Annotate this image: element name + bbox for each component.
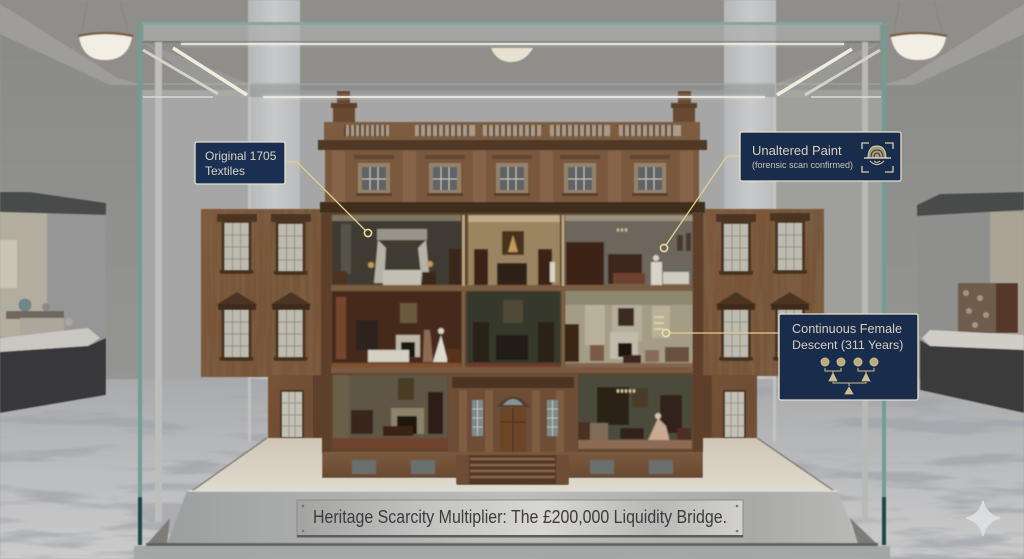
right door lower — [699, 375, 757, 459]
side walls — [0, 34, 140, 380]
left door lower — [268, 375, 326, 459]
chimneys — [331, 91, 697, 123]
icon: matrilineal family tree — [821, 358, 878, 394]
icon: fingerprint scan — [862, 143, 893, 172]
display plinth — [134, 438, 890, 559]
ceiling coves — [0, 4, 140, 92]
room: olive lower left — [333, 375, 448, 449]
house body — [322, 213, 703, 453]
balustrade — [324, 122, 700, 141]
callout: Continuous Female Descent — [662, 314, 918, 400]
room: bedroom — [332, 215, 461, 286]
room: green parlour — [467, 291, 560, 368]
left display vitrine — [0, 192, 106, 413]
basement — [322, 452, 703, 478]
entrance steps — [456, 455, 569, 485]
upper storey — [318, 140, 707, 213]
callout: Unaltered Paint: (forensic scan confirmed) — [752, 160, 853, 170]
left door upper — [201, 209, 326, 377]
LED light strips — [143, 44, 881, 97]
room: cream drawing room — [565, 291, 693, 368]
room: panelled dining — [332, 291, 461, 368]
pillars — [248, 0, 300, 385]
callout: Original 1705 Textiles: Textiles — [205, 164, 245, 178]
marble floor — [0, 379, 1024, 559]
room: bedroom right — [565, 215, 693, 286]
icon: sparkle watermark — [966, 501, 1000, 536]
interior rooms — [330, 215, 695, 449]
brass plaque — [297, 500, 743, 538]
dolls house — [201, 91, 824, 459]
room: tan salon — [468, 215, 560, 286]
callout: Continuous Female Descent: Descent (311 Years) — [792, 338, 903, 352]
first floor strip — [330, 285, 695, 291]
glass case frame — [138, 22, 887, 545]
room: green lower right — [578, 375, 692, 449]
entrance facade — [448, 373, 578, 453]
callout: Continuous Female Descent: Continuous Female — [792, 322, 902, 336]
brick side walls — [321, 213, 331, 453]
brass plaque: Heritage Scarcity Multiplier: The £200,000 Liquidity Bridge. — [313, 507, 727, 527]
glass case rear structure — [143, 42, 880, 442]
callout: Original 1705 Textiles: Original 1705 — [205, 149, 277, 163]
house front structure — [321, 213, 703, 485]
middle floor strip — [330, 367, 695, 373]
ceiling lamps — [78, 0, 947, 62]
right display vitrine — [917, 192, 1024, 413]
callout: Unaltered Paint — [660, 132, 901, 252]
callout: Unaltered Paint: Unaltered Paint — [752, 143, 842, 158]
callout: Original 1705 Textiles — [195, 142, 372, 237]
back wall inside case — [140, 90, 885, 385]
right door upper — [699, 209, 824, 376]
